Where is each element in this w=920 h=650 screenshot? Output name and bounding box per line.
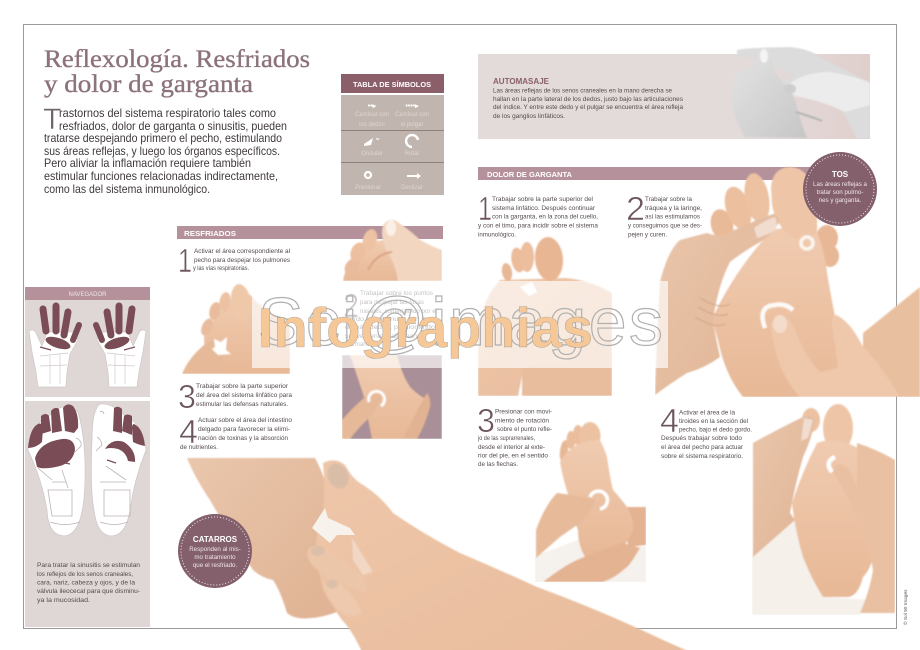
dolor step 3 text: sobre el punto refle- (497, 426, 552, 433)
dolor step 2 text: y conseguimos que se des- (628, 222, 702, 230)
step 1 text: Activar el área correspondiente al (194, 248, 290, 255)
panel: navegador (25, 287, 150, 627)
icon: hand reflex maps (29, 306, 146, 387)
navigator caption: ya la mucosidad. (37, 597, 90, 604)
badge: catarros: CATARROS (193, 535, 238, 544)
step 4 text: delgado para favorecer la elimi- (198, 426, 290, 433)
photo: large foot with hands (655, 167, 920, 397)
panel: tabla de símbolos: el pulgar (400, 122, 424, 128)
intro text (43, 103, 287, 196)
dolor step 4 text: Después trabajar sobre todo (661, 435, 742, 442)
badge: catarros (178, 514, 252, 588)
badge: catarros: que el resfriado. (193, 562, 237, 569)
step 2 text: nasales, comenzando por el (360, 308, 437, 315)
photo: massage step 1 resfriados (342, 220, 442, 281)
step 2 text: suavemente y alternando (345, 333, 425, 340)
panel: tabla de símbolos: los dedos (359, 122, 385, 128)
photo: massage pressure resfriados (342, 355, 442, 439)
step 4 text: 4 (179, 413, 198, 450)
dolor step 1 text: con la garganta, en la zona del cuello, (492, 214, 598, 220)
dolor step 2 text (626, 190, 702, 238)
dolor step 4 text: 4 (660, 402, 679, 439)
step 1 text: 1 (178, 242, 192, 279)
panel: tabla de símbolos: Caminar con (355, 112, 389, 118)
panel: tabla de símbolos: Caminar con (395, 112, 429, 118)
step 4 text: de nutrientes. (180, 444, 218, 451)
step 4 text (179, 413, 292, 451)
photo: dolor step 1 foot (478, 236, 612, 396)
icon: white arrow on toes (312, 508, 355, 543)
section heading: dolor de garganta: DOLOR DE GARGANTA (487, 170, 573, 179)
panel: navegador: NAVEGADOR (69, 292, 107, 298)
photo credit: © Sol 90 Images (902, 589, 909, 625)
step 3 text: Trabajar sobre la parte superior (196, 383, 289, 390)
intro text: sus áreas reflejas, y luego los órganos específicos. (44, 145, 280, 158)
dolor step 1 text: y con el timo, para incidir sobre el sistema (478, 222, 598, 230)
icon: left foot reflex map (28, 404, 85, 536)
section heading: dolor de garganta (478, 167, 816, 180)
dolor step 1 text: Trabajar sobre la parte superior del (492, 196, 593, 203)
badge: tos: tratar son pulmo- (817, 189, 863, 196)
dolor step 1 text (478, 190, 598, 238)
step 3 text: estimular las defensas naturales. (196, 401, 288, 408)
dolor step 2 text: así las estimulamos (645, 214, 700, 220)
intro text: rastornos del sistema respiratorio tales como (59, 107, 276, 120)
dolor step 2 text: pejen y curen. (628, 232, 667, 238)
dolor step 3 text: miento de rotación (495, 418, 549, 424)
step 2 text: para despejar las fosas (360, 299, 424, 306)
dolor step 3 text (477, 402, 552, 468)
step 1 text: pecho para despejar los pulmones (194, 257, 290, 264)
step 2 text: Trabajar sobre los puntos (360, 290, 433, 297)
intro text: Pero aliviar la inflamación requiere también (44, 157, 251, 170)
step 1 text (178, 242, 290, 279)
navigator caption: cara, nariz, cabeza y ojos, y de la (37, 580, 135, 586)
watermark overlay: Infographias (258, 296, 593, 359)
dolor step 4 text (660, 402, 752, 460)
photo: large hand holding foot (187, 458, 690, 650)
intro text: resfriados, dolor de garganta o sinusitis, pueden (59, 120, 287, 133)
panel: tabla de símbolos: ••••▸ (405, 103, 419, 110)
intro text: T (43, 103, 61, 136)
navigator caption: los reflejos de los senos craneales, (37, 571, 133, 578)
step 2 text: 2 (343, 287, 359, 324)
navigator caption: válvula ileocecal para que disminu- (37, 588, 140, 595)
dolor step 3 text: Presionar con movi- (495, 408, 552, 416)
dolor step 3 text: de las flechas. (478, 461, 518, 468)
dolor step 2 text: tráquea y la laringe, (645, 205, 702, 212)
dolor step 4 text: Activar el área de la (679, 410, 735, 416)
dolor step 1 text: inmunológico. (478, 232, 516, 238)
watermark overlay: Sci@images (258, 284, 663, 360)
intro text: como las del sistema inmunológico. (44, 183, 210, 196)
section heading: resfriados (177, 226, 443, 239)
panel: tabla de símbolos: Rotar (405, 151, 419, 157)
dolor step 4 text: pecho, bajo el dedo gordo. (679, 426, 752, 434)
dolor step 4 text: tiroides en la sección del (679, 418, 748, 425)
dolor step 3 text: 3 (477, 402, 495, 439)
dolor step 1 text: 1 (478, 190, 492, 227)
panel: automasaje: AUTOMASAJE (493, 77, 550, 86)
badge: catarros: Responden al mis- (189, 546, 241, 553)
dolor step 1 text: sistema linfático. Después continuar (492, 205, 596, 212)
dolor step 2 text: Trabajar sobre la (645, 196, 692, 203)
step 3 text: del área del sistema linfático para (196, 392, 292, 399)
step 3 text: 3 (178, 378, 196, 415)
badge: tos (803, 152, 877, 226)
step 2 text (343, 287, 437, 348)
navigator caption (37, 562, 140, 604)
step 2 text: las manos. (345, 341, 375, 348)
step 4 text: Actuar sobre el área del intestino (198, 417, 292, 424)
icon: right foot reflex map (91, 404, 146, 536)
badge: catarros: mo tratamiento (194, 554, 236, 561)
panel: automasaje: hallan en la parte lateral de los dedos, justo bajo las articulaciones (493, 96, 683, 103)
title: y dolor de garganta (44, 71, 253, 98)
photo: massage step 2 resfriados (182, 283, 290, 374)
panel: tabla de símbolos: TABLA DE SÍMBOLOS (353, 80, 431, 89)
title: Reflexología. Resfriados (44, 46, 310, 73)
panel: automasaje (478, 47, 870, 139)
section heading: resfriados: RESFRIADOS (184, 229, 236, 238)
step 4 text: nación de toxinas y la absorción (198, 435, 288, 442)
dolor step 3 text: rior del pie, en el sentido (478, 452, 548, 460)
panel: tabla de símbolos: Ondular (361, 151, 383, 157)
step 3 text (178, 378, 292, 415)
badge: tos: nes y garganta. (819, 197, 862, 204)
intro text: estimular funciones relacionadas indirectamente, (44, 170, 278, 183)
dolor step 3 text: desde el interior al exte- (478, 444, 545, 451)
step 2 text: gordo, y continuar con los (345, 316, 431, 323)
dolor step 2 text: 2 (626, 190, 645, 227)
panel: automasaje: de los ganglios linfáticos. (493, 113, 565, 120)
photo: hands self massage in grey (732, 47, 870, 139)
step 1 text: y las vías respiratorias. (193, 265, 249, 272)
panel: tabla de símbolos: Presionar (355, 185, 381, 191)
photo: dolor step 4 foot (752, 404, 895, 615)
badge: tos: Las áreas reflejas a (813, 181, 868, 188)
panel: tabla de símbolos (341, 74, 444, 195)
title (44, 46, 310, 98)
panel: tabla de símbolos: ••▸ (368, 103, 377, 110)
dolor step 4 text: sobre el sistema respiratorio. (661, 453, 743, 460)
navigator caption: Para tratar la sinusitis se estimulan (37, 562, 140, 569)
panel: automasaje: del índice. Y entre este dedo y el pulgar se encuentra el área refleja (493, 104, 683, 111)
step 2 text: demás dedos, presionando (345, 324, 436, 331)
badge: tos: TOS (832, 170, 849, 179)
intro text: tratarse despejando primero el pecho, estimulando (44, 132, 282, 145)
panel: tabla de símbolos: Deslizar (401, 185, 423, 191)
dolor step 4 text: el área del pecho para actuar (661, 444, 744, 451)
photo: dolor step 3 foot (535, 422, 646, 582)
dolor step 3 text: jo de las suprarrenales, (477, 435, 535, 442)
panel: automasaje: Las áreas reflejas de los senos craneales en la mano derecha se (493, 88, 672, 94)
